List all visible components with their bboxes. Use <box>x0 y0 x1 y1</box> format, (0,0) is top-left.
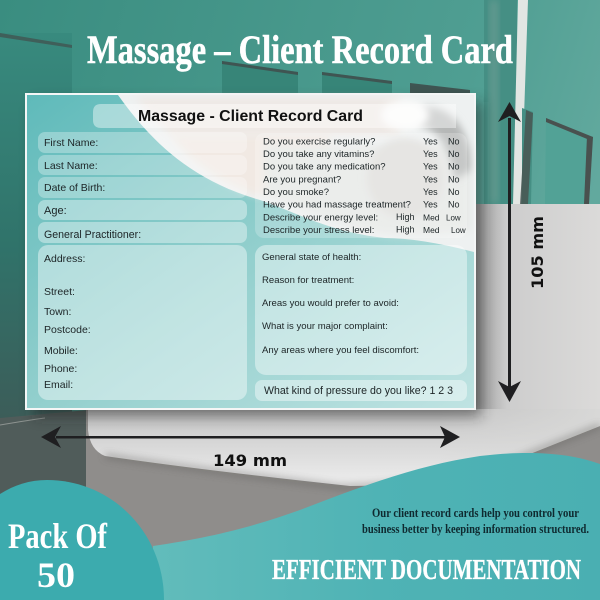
badge: pack of 50 <box>0 480 164 600</box>
panel: yes/no questions: Do you take any vitamins? <box>263 149 374 160</box>
field: date of birth: Date of Birth: <box>44 182 105 194</box>
field: date of birth <box>38 177 247 198</box>
field: general practitioner <box>38 222 247 243</box>
panel: address: Street: <box>44 286 75 298</box>
panel: yes/no questions: Yes <box>423 149 438 159</box>
photo area with woman and flower <box>118 95 474 252</box>
arrow: height dimension <box>498 102 521 402</box>
panel: health questions: Areas you would prefer to avoid: <box>262 298 399 309</box>
panel: health questions <box>255 245 467 375</box>
panel: health questions: What is your major complaint: <box>262 321 388 332</box>
badge: pack of 50: Pack Of <box>8 516 108 556</box>
panel: address: Mobile: <box>44 345 78 357</box>
badge: pack of 50: 50 <box>37 555 75 595</box>
panel: yes/no questions: No <box>448 149 460 159</box>
panel: yes/no questions <box>255 133 467 238</box>
panel: address: Town: <box>44 306 71 318</box>
panel: address <box>38 245 247 400</box>
panel: yes/no questions: Low <box>446 214 461 222</box>
panel: yes/no questions: Med <box>423 225 440 235</box>
record card <box>25 93 481 416</box>
teal wave panel <box>153 453 600 600</box>
title: Massage – Client Record Card <box>87 27 513 72</box>
label: 149 mm: 149 mm <box>213 451 287 470</box>
panel: yes/no questions: Low <box>451 226 466 235</box>
field: last name: Last Name: <box>44 160 98 172</box>
panel: address: Postcode: <box>44 324 91 336</box>
panel: address: Email: <box>44 379 73 391</box>
field: first name <box>38 132 247 153</box>
panel: yes/no questions: No <box>448 174 460 184</box>
panel: yes/no questions: Have you had massage treatment? <box>263 200 411 210</box>
panel: yes/no questions: Yes <box>423 162 438 172</box>
panel: yes/no questions: Yes <box>423 200 438 210</box>
panel: pressure question <box>255 380 467 401</box>
label: 105 mm: 105 mm <box>528 216 547 289</box>
panel: yes/no questions: No <box>448 187 460 197</box>
panel: yes/no questions: Yes <box>423 136 438 146</box>
panel: yes/no questions: Do you exercise regularly? <box>263 136 375 148</box>
field: general practitioner: General Practitioner: <box>44 229 141 241</box>
panel: address: Phone: <box>44 363 77 375</box>
title strip: Massage - Client Record Card <box>138 108 363 125</box>
field: age <box>38 200 247 220</box>
panel: yes/no questions: High <box>396 224 415 234</box>
panel: yes/no questions: No <box>448 136 460 146</box>
panel: yes/no questions: Do you smoke? <box>263 187 329 198</box>
panel: health questions: General state of health: <box>262 252 361 263</box>
field: first name: First Name: <box>44 137 98 149</box>
field: age: Age: <box>44 205 67 217</box>
title strip <box>93 104 456 128</box>
panel: yes/no questions: Are you pregnant? <box>263 174 341 186</box>
description text <box>362 505 589 536</box>
panel: pressure question: What kind of pressure do you like? 1 2 3 <box>264 385 453 397</box>
panel: health questions: Any areas where you feel discomfort: <box>262 345 419 356</box>
panel: yes/no questions: Med <box>423 212 440 222</box>
panel: address: Address: <box>44 253 85 265</box>
panel: health questions: Reason for treatment: <box>262 275 354 286</box>
field: last name <box>38 155 247 175</box>
panel: yes/no questions: No <box>448 162 460 172</box>
panel: yes/no questions: Yes <box>423 174 438 184</box>
arrow: width dimension <box>41 426 460 448</box>
panel: yes/no questions: No <box>448 200 460 210</box>
panel: yes/no questions: Yes <box>423 187 438 197</box>
panel: yes/no questions: High <box>396 212 415 222</box>
panel: yes/no questions: Describe your energy level: <box>263 212 378 224</box>
panel: yes/no questions: Describe your stress level: <box>263 225 374 236</box>
panel: yes/no questions: Do you take any medication? <box>263 162 386 172</box>
